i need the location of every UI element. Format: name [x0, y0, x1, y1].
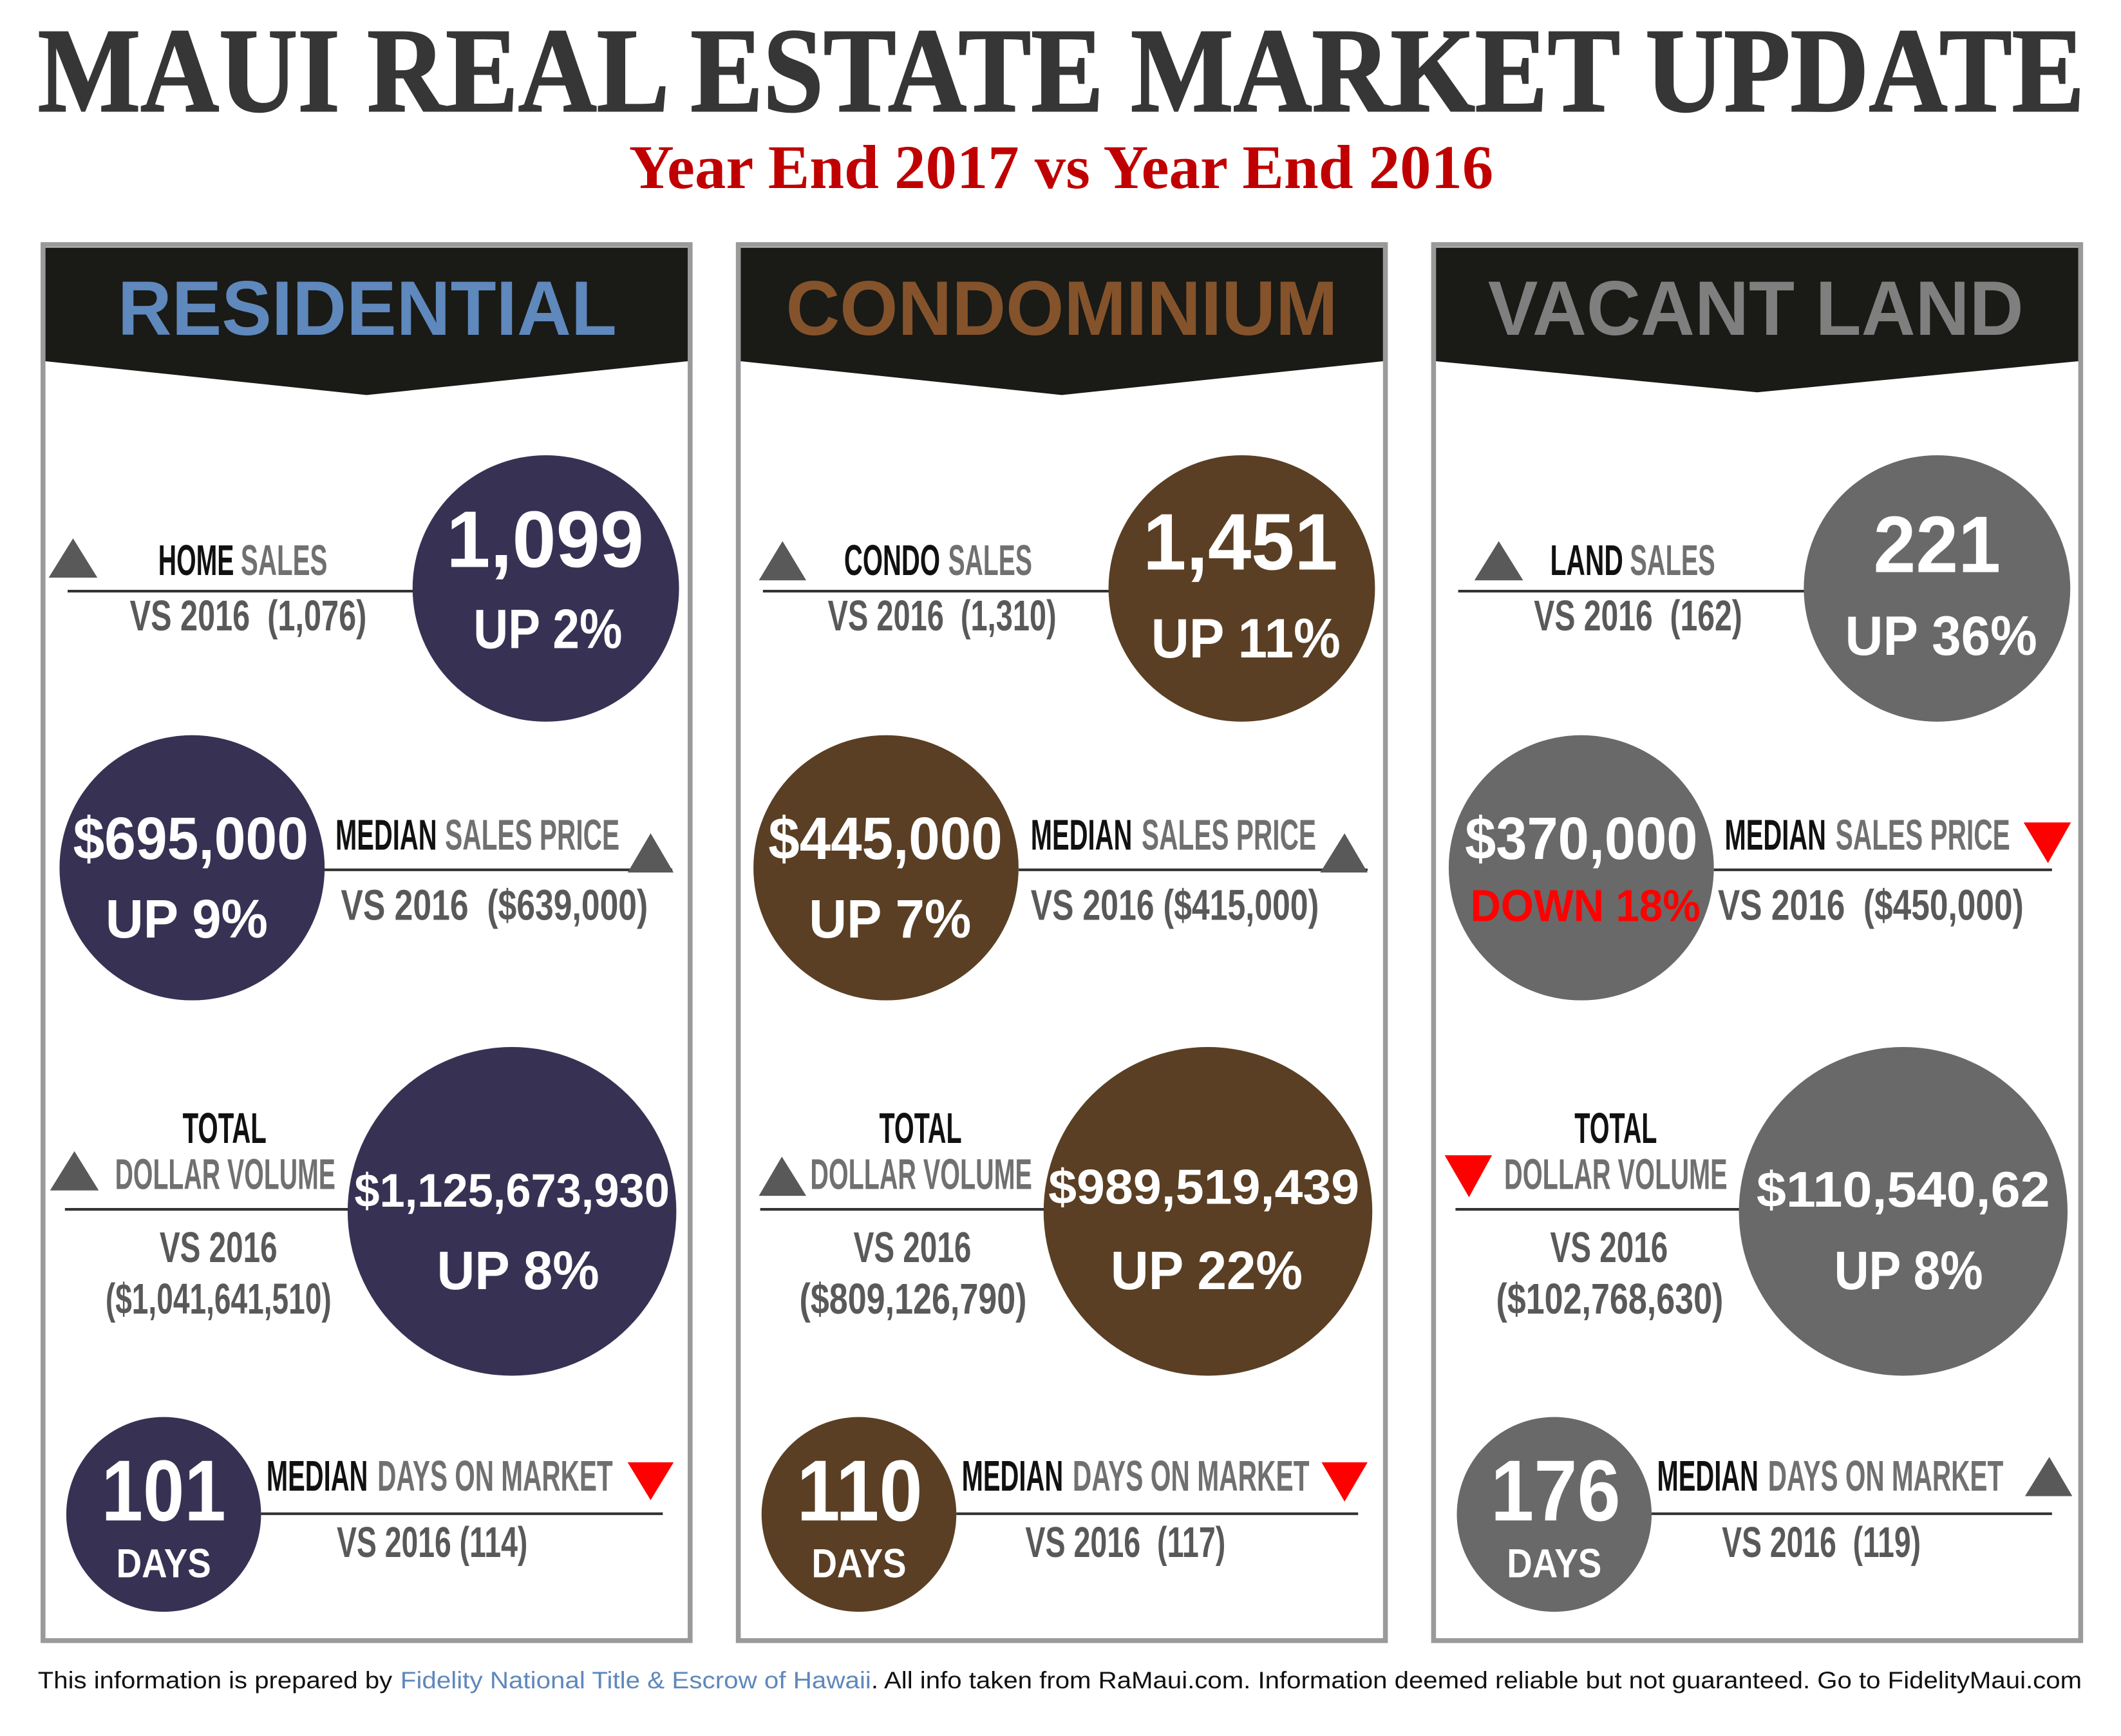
panel: condominium	[739, 245, 1386, 1641]
circle: days value: 101	[102, 1442, 226, 1539]
circle: land sales value: UP 36%	[1845, 605, 2037, 667]
icon: up triangle	[50, 1151, 99, 1191]
label: median sales price	[335, 811, 619, 859]
comparison: 2016 days: VS 2016 (114)	[337, 1518, 527, 1567]
metric: land sales	[1458, 455, 2070, 722]
metric: condo sales	[759, 455, 1375, 722]
metric: total dollar volume	[50, 1047, 676, 1376]
circle: dollar volume value: UP 8%	[437, 1240, 599, 1301]
circle: days value: DAYS	[117, 1542, 211, 1587]
label: days on market: MEDIAN	[962, 1452, 1063, 1500]
circle: days value: 176	[1491, 1442, 1621, 1539]
circle: days value	[1457, 1417, 1652, 1612]
circle: land sales value	[1804, 455, 2070, 722]
circle: dollar volume value	[1044, 1047, 1372, 1376]
footer disclaimer	[38, 1667, 2082, 1694]
label: home sales: SALES	[241, 536, 327, 585]
icon: up triangle	[1475, 541, 1523, 580]
comparison: 2016 volume: ($102,768,630)	[1496, 1275, 1723, 1323]
label: median sales price: SALES PRICE	[445, 811, 619, 859]
label: total dollar volume: TOTAL	[183, 1104, 267, 1153]
circle: dollar volume value: $1,125,673,930	[354, 1164, 670, 1217]
circle: median price value: UP 7%	[809, 889, 971, 949]
label: median sales price: SALES PRICE	[1142, 811, 1316, 859]
metric: median sales price	[1449, 735, 2071, 1001]
label: total dollar volume: TOTAL	[879, 1104, 962, 1153]
comparison: 2016 volume: VS 2016	[854, 1223, 971, 1272]
metric: median days on market	[762, 1417, 1368, 1612]
comparison: 2016 price: VS 2016 ($450,000)	[1718, 882, 2024, 930]
circle: dollar volume value	[348, 1047, 676, 1376]
label: total dollar volume: TOTAL	[1574, 1104, 1657, 1153]
circle: dollar volume value: UP 22%	[1111, 1240, 1303, 1301]
metric: median days on market	[1457, 1417, 2072, 1612]
circle: home sales value: 1,099	[446, 495, 644, 584]
condominium heading: CONDOMINIUM	[786, 266, 1338, 352]
comparison: 2016 volume: VS 2016	[1550, 1223, 1668, 1272]
icon: down triangle	[2024, 822, 2071, 863]
icon: up triangle	[759, 541, 806, 580]
comparison: 2016 volume	[800, 1223, 1026, 1323]
subtitle: Year End 2017 vs Year End 2016	[629, 133, 1493, 202]
comparison: 2016 price: VS 2016 ($639,000)	[341, 882, 648, 930]
label: days on market: DAYS ON MARKET	[1073, 1452, 1310, 1500]
circle: days value	[762, 1417, 956, 1612]
metric: total dollar volume	[759, 1047, 1372, 1376]
footer disclaimer: This information is prepared by	[38, 1667, 393, 1694]
circle: condo sales value	[1109, 455, 1375, 722]
circle: median price value: UP 9%	[106, 889, 268, 949]
icon: down triangle	[628, 1462, 674, 1500]
icon: up triangle	[759, 1156, 806, 1196]
label: median sales price	[1031, 811, 1316, 859]
comparison: 2016 days: VS 2016 (117)	[1025, 1518, 1225, 1567]
circle: median price value: $370,000	[1465, 805, 1697, 872]
label: total dollar volume	[810, 1104, 1032, 1199]
circle: median price value: $445,000	[768, 805, 1003, 872]
label: total dollar volume: DOLLAR VOLUME	[810, 1151, 1032, 1199]
icon: up triangle	[49, 538, 97, 578]
label: days on market: MEDIAN	[1657, 1452, 1758, 1500]
label: land sales: SALES	[1630, 536, 1715, 585]
label: days on market	[1657, 1452, 2003, 1500]
label: total dollar volume: DOLLAR VOLUME	[115, 1151, 335, 1199]
comparison: 2016 volume: ($809,126,790)	[800, 1275, 1026, 1323]
circle: dollar volume value	[1739, 1047, 2068, 1376]
residential frame	[43, 245, 690, 1641]
circle: median price value: DOWN 18%	[1471, 881, 1701, 931]
icon: down triangle	[1445, 1155, 1492, 1197]
circle: days value: 110	[797, 1442, 923, 1539]
label: median sales price: MEDIAN	[1724, 811, 1826, 859]
metric: median days on market	[66, 1417, 674, 1612]
metric: median sales price	[59, 735, 674, 1001]
circle: condo sales value: UP 11%	[1151, 608, 1341, 670]
comparison: 2016 price: VS 2016 ($415,000)	[1031, 882, 1319, 930]
metric: home sales	[49, 455, 679, 722]
circle: dollar volume value: $989,519,439	[1048, 1161, 1359, 1215]
panel: vacant land	[1433, 245, 2080, 1641]
circle: home sales value: UP 2%	[473, 598, 622, 660]
icon: down triangle	[1321, 1462, 1368, 1502]
comparison: 2016 volume	[1496, 1223, 1723, 1323]
comparison: 2016 sales: VS 2016 (1,076)	[130, 592, 366, 640]
circle: land sales value: 221	[1874, 501, 2001, 590]
label: condo sales: SALES	[948, 536, 1032, 585]
label: condo sales: CONDO	[844, 536, 940, 585]
metric: total dollar volume	[1445, 1047, 2068, 1376]
residential banner	[46, 247, 688, 395]
label: total dollar volume: DOLLAR VOLUME	[1504, 1151, 1728, 1199]
vacant land frame	[1433, 245, 2080, 1641]
label: days on market	[962, 1452, 1310, 1500]
circle: days value: DAYS	[1507, 1542, 1601, 1587]
vacant land banner	[1436, 247, 2079, 392]
label: total dollar volume	[115, 1104, 335, 1199]
comparison: 2016 volume	[106, 1223, 332, 1323]
label: days on market: MEDIAN	[267, 1452, 368, 1500]
residential heading: RESIDENTIAL	[118, 266, 617, 352]
circle: median price value: $695,000	[73, 805, 308, 872]
comparison: 2016 volume: VS 2016	[160, 1223, 278, 1272]
comparison: 2016 days: VS 2016 (119)	[1722, 1518, 1921, 1567]
circle: median price value	[1449, 735, 1714, 1001]
icon: up triangle	[2025, 1457, 2072, 1496]
circle: home sales value	[413, 455, 679, 722]
icon: up triangle	[1320, 833, 1368, 873]
vacant land heading: VACANT LAND	[1488, 266, 2024, 352]
circle: median price value	[59, 735, 325, 1001]
footer disclaimer: . All info taken from RaMaui.com. Information deemed reliable but not guaranteed. Go to FidelityMaui.com	[871, 1667, 2082, 1694]
footer disclaimer: Fidelity National Title & Escrow of Hawaii	[401, 1667, 871, 1694]
metric: median sales price	[753, 735, 1368, 1001]
panel: residential	[43, 245, 690, 1641]
label: total dollar volume	[1504, 1104, 1728, 1199]
label: median sales price	[1724, 811, 2010, 859]
circle: condo sales value: 1,451	[1143, 498, 1338, 587]
label: days on market: DAYS ON MARKET	[377, 1452, 613, 1500]
comparison: 2016 volume: ($1,041,641,510)	[106, 1275, 332, 1323]
label: median sales price: MEDIAN	[335, 811, 437, 859]
circle: dollar volume value: UP 8%	[1834, 1240, 1983, 1301]
comparison: 2016 sales: VS 2016 (162)	[1534, 592, 1742, 640]
comparison: 2016 sales: VS 2016 (1,310)	[828, 592, 1057, 640]
circle: dollar volume value: $110,540,62	[1757, 1162, 2050, 1218]
circle: days value	[66, 1417, 261, 1612]
condominium banner	[740, 247, 1383, 395]
circle: median price value	[753, 735, 1019, 1001]
label: median sales price: MEDIAN	[1031, 811, 1132, 859]
label: days on market	[267, 1452, 613, 1500]
icon: up triangle	[628, 833, 674, 873]
condominium frame	[739, 245, 1386, 1641]
circle: days value: DAYS	[811, 1542, 907, 1587]
label: land sales: LAND	[1550, 536, 1623, 585]
label: median sales price: SALES PRICE	[1836, 811, 2010, 859]
label: home sales: HOME	[158, 536, 234, 585]
